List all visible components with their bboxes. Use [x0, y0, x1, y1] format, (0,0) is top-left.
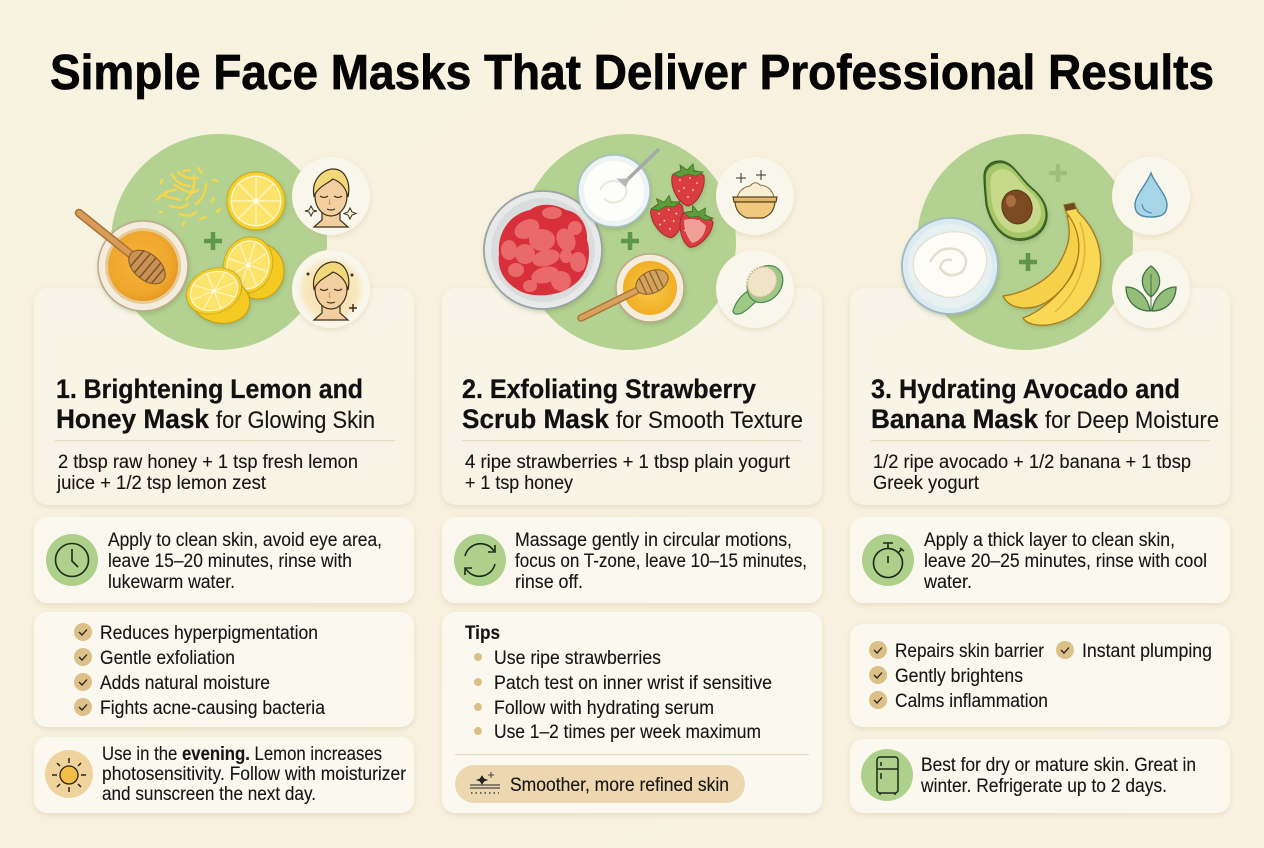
application card: Apply a thick layer to clean skin,	[924, 530, 1175, 551]
storage note card: Best for dry or mature skin. Great in	[921, 755, 1196, 776]
icon: green leaves	[1126, 266, 1176, 311]
panel: avocado and banana mask	[850, 134, 1230, 813]
icon: exfoliating brush	[733, 258, 790, 314]
recipe heading	[871, 374, 1219, 434]
ingredients: 4 ripe strawberries + 1 tbsp plain yogurt	[465, 452, 791, 473]
ingredients	[56, 452, 358, 494]
timing note card: photosensitivity. Follow with moisturizer	[102, 764, 407, 785]
panel: lemon and honey mask	[34, 134, 414, 813]
application card	[442, 517, 822, 603]
recipe heading: for Glowing Skin	[216, 407, 375, 434]
recipe heading	[56, 374, 375, 434]
timing note card: and sunscreen the next day.	[102, 784, 316, 805]
timing note card: Use in the evening. Lemon increases	[102, 744, 382, 765]
ingredients: 2 tbsp raw honey + 1 tsp fresh lemon	[58, 452, 358, 473]
recipe card background	[850, 288, 1230, 505]
icon: water drop	[1135, 173, 1167, 217]
recipe card background	[442, 288, 822, 505]
ingredients: + 1 tsp honey	[465, 473, 573, 494]
recipe heading	[462, 374, 803, 434]
title: Simple Face Masks That Deliver Professional Results	[50, 46, 1214, 100]
tips card: Smoother, more refined skin	[510, 775, 729, 796]
application card: rinse off.	[515, 572, 583, 593]
tips card: Tips	[465, 623, 500, 644]
strawberries	[648, 164, 716, 252]
benefits card: Calms inflammation	[895, 691, 1048, 712]
tips card: Use ripe strawberries	[494, 648, 661, 669]
recipe heading: 3. Hydrating Avocado and	[871, 374, 1180, 404]
application card: lukewarm water.	[108, 572, 235, 593]
storage note card: winter. Refrigerate up to 2 days.	[920, 776, 1167, 797]
benefits card: Instant plumping	[1082, 641, 1212, 662]
illustration: strawberry, yogurt and honey ingredients	[484, 134, 794, 350]
recipe card background	[34, 288, 414, 505]
recipe heading: for Smooth Texture	[616, 407, 803, 434]
benefits card: Gently brightens	[895, 666, 1023, 687]
application card: leave 15–20 minutes, rinse with	[108, 551, 352, 572]
application card: leave 20–25 minutes, rinse with cool	[924, 551, 1207, 572]
tips card	[442, 612, 822, 813]
tips card: Use 1–2 times per week maximum	[494, 722, 761, 743]
benefits card: Reduces hyperpigmentation	[100, 623, 318, 644]
benefits card	[34, 612, 414, 727]
benefits card: Gentle exfoliation	[100, 648, 235, 669]
recipe heading: Banana Mask	[871, 404, 1039, 434]
ingredients: juice + 1/2 tsp lemon zest	[56, 473, 267, 494]
application card: focus on T-zone, leave 10–15 minutes,	[515, 551, 807, 572]
benefits card	[850, 624, 1230, 727]
icon: glowing face	[301, 260, 361, 320]
application card: water.	[923, 572, 972, 593]
application card: Massage gently in circular motions,	[515, 530, 792, 551]
benefits card: Adds natural moisture	[100, 673, 270, 694]
tips card: Follow with hydrating serum	[494, 698, 714, 719]
ingredients: 1/2 ripe avocado + 1/2 banana + 1 tbsp	[873, 452, 1191, 473]
recipe heading: Honey Mask	[56, 404, 210, 434]
benefits card: Repairs skin barrier	[895, 641, 1045, 662]
panel: strawberry scrub mask	[442, 134, 822, 813]
recipe heading: 1. Brightening Lemon and	[56, 374, 363, 404]
icon: scrub bowl	[733, 170, 777, 218]
recipe heading: 2. Exfoliating Strawberry	[462, 374, 756, 404]
recipe heading: for Deep Moisture	[1045, 407, 1219, 434]
storage note card	[850, 739, 1230, 813]
application card	[34, 517, 414, 603]
ingredients: Greek yogurt	[873, 473, 980, 494]
timing note card	[34, 737, 414, 813]
application card: Apply to clean skin, avoid eye area,	[108, 530, 382, 551]
illustration: lemon and honey ingredients	[79, 134, 370, 350]
tips card: Patch test on inner wrist if sensitive	[494, 673, 772, 694]
icon: face with sparkles	[305, 169, 356, 227]
ingredients	[465, 452, 791, 494]
ingredients	[873, 452, 1191, 494]
benefits card: Fights acne-causing bacteria	[100, 698, 325, 719]
recipe heading: Scrub Mask	[462, 404, 610, 434]
application card	[850, 517, 1230, 603]
illustration: avocado, banana and yogurt ingredients	[902, 134, 1190, 350]
